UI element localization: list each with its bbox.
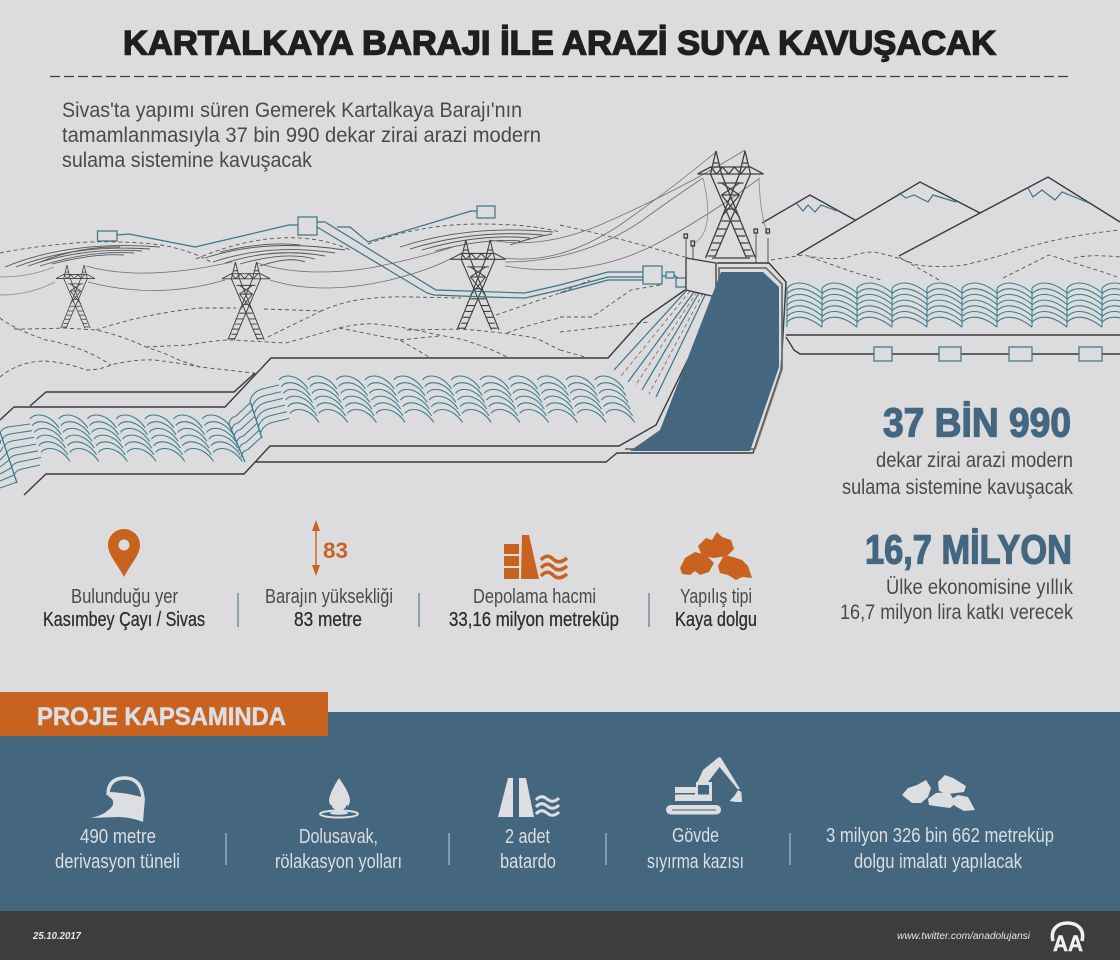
logo: AA <box>1053 931 1083 956</box>
item: spillway: Dolusavak, <box>299 826 378 848</box>
title: KARTALKAYA BARAJI İLE ARAZİ SUYA KAVUŞACAK <box>123 24 996 62</box>
irrigation scallops: left field <box>0 415 242 488</box>
reservoir <box>630 272 779 451</box>
statistic: 37 bin 990: 37 BİN 990 <box>883 400 1071 446</box>
item: excavation: Gövde <box>672 825 719 847</box>
item: cofferdam: 2 adet <box>505 826 550 848</box>
fact: construction type <box>675 532 757 631</box>
spillway channels <box>614 283 714 397</box>
fact: construction type: Kaya dolgu <box>675 609 757 631</box>
statistic: 37 bin 990: sulama sistemine kavuşacak <box>842 476 1073 499</box>
fact: storage volume: 33,16 milyon metreküp <box>449 609 619 631</box>
fact: height <box>265 520 393 631</box>
statistic: 16,7 milyon <box>840 526 1073 624</box>
illustration: dam landscape <box>0 150 1120 495</box>
statistic: 37 bin 990 <box>842 400 1073 499</box>
date: 25.10.2017 <box>32 931 81 942</box>
item: fill works: dolgu imalatı yapılacak <box>854 851 1023 873</box>
mountains <box>762 177 1120 256</box>
item: fill works <box>826 775 1054 873</box>
icon: tunnel <box>91 778 145 822</box>
statistic: 16,7 milyon: 16,7 MİLYON <box>865 526 1072 572</box>
item: tunnel: derivasyon tüneli <box>55 851 180 873</box>
icon: stones <box>902 775 975 811</box>
heading tab <box>0 692 328 736</box>
item: tunnel <box>55 778 180 873</box>
icon: height arrow <box>312 520 320 576</box>
statistic: 16,7 milyon: Ülke ekonomisine yıllık <box>886 576 1073 599</box>
fact: height: Barajın yüksekliği <box>265 586 393 608</box>
icon: rocks <box>680 532 752 580</box>
icon: water drop <box>320 778 358 818</box>
canal boxes <box>874 347 1102 361</box>
fact: location: Bulunduğu yer <box>71 586 178 608</box>
fact: height: 83 <box>323 538 348 563</box>
power lines <box>0 150 770 295</box>
fact: location <box>43 529 205 631</box>
hill hatching <box>5 230 553 267</box>
panel: project scope <box>0 692 1120 911</box>
water pipes <box>98 206 686 298</box>
item: excavation: sıyırma kazısı <box>647 851 744 873</box>
footer <box>0 911 1120 960</box>
icon: cofferdam <box>498 778 559 817</box>
fact: storage volume: Depolama hacmi <box>473 586 596 608</box>
intro text: sulama sistemine kavuşacak <box>62 149 312 172</box>
heading: PROJE KAPSAMINDA <box>37 703 286 731</box>
item: excavation <box>647 757 744 873</box>
fact: location: Kasımbey Çayı / Sivas <box>43 609 205 631</box>
irrigation scallops: transition <box>229 385 289 462</box>
item: cofferdam <box>498 778 559 873</box>
statistic: 37 bin 990: dekar zirai arazi modern <box>876 449 1073 472</box>
item: cofferdam: batardo <box>500 851 556 873</box>
terrace lines <box>0 263 1120 495</box>
intro text: Sivas'ta yapımı süren Gemerek Kartalkaya Barajı'nın <box>62 99 522 122</box>
item: tunnel: 490 metre <box>80 826 156 848</box>
icon: dam <box>504 535 567 579</box>
fact: construction type: Yapılış tipi <box>680 586 752 608</box>
irrigation scallops: right field <box>787 283 1120 327</box>
item: spillway <box>275 778 402 873</box>
item: spillway: rölakasyon yolları <box>275 851 402 873</box>
intro text <box>62 99 541 172</box>
icon: map pin <box>108 529 140 577</box>
fact: storage volume <box>449 535 619 631</box>
fact: height: 83 metre <box>294 609 362 631</box>
icon: excavator <box>666 757 742 814</box>
item: fill works: 3 milyon 326 bin 662 metreküp <box>826 825 1054 847</box>
pylons <box>56 151 763 340</box>
hills and dashed terrain <box>0 224 1120 377</box>
irrigation scallops: middle field <box>279 376 635 422</box>
intro text: tamamlanmasıyla 37 bin 990 dekar zirai arazi modern <box>62 124 541 147</box>
source: www.twitter.com/anadolujansi <box>897 931 1031 942</box>
statistic: 16,7 milyon: 16,7 milyon lira katkı verecek <box>840 601 1073 624</box>
dam wall <box>686 258 716 297</box>
